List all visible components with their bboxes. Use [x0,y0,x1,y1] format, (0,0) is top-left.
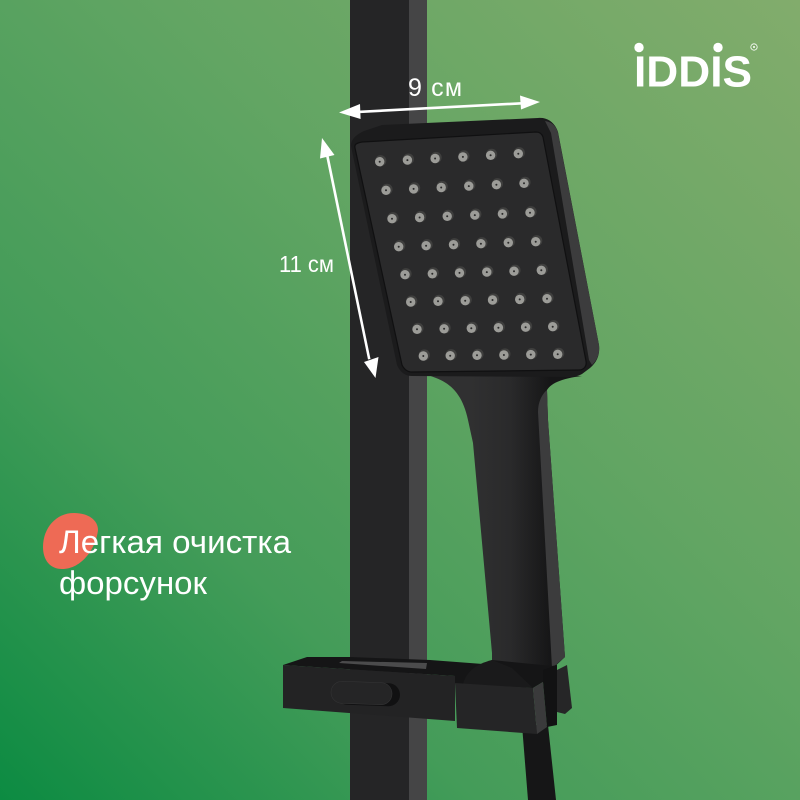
wall holder bracket [283,657,572,734]
dimension arrow: width 9 cm [339,96,540,119]
holder clip [557,665,572,714]
holder side faces [533,682,547,734]
head body [351,118,599,377]
caption: форсунок [59,565,208,601]
holder left block [283,665,455,721]
caption: Легкая очистка [59,524,291,560]
label: 11 cm: 11 см [279,251,334,277]
shower head [351,118,599,377]
slider button [331,681,400,707]
shower handle [420,372,582,669]
pivot dome [463,660,533,688]
spray nozzles [375,147,564,361]
shower hose [522,725,556,800]
holder right block [455,683,537,734]
label: 9 cm: 9 см [408,74,462,102]
caption [59,524,291,601]
head right side facet [545,121,599,365]
metal plate [339,661,427,669]
nozzle plate [355,132,586,372]
dimension arrow: height 11 cm [320,138,378,378]
red accent blob [43,513,98,569]
holder top face [283,657,557,688]
logo: IDDIS: IDDIS [634,48,752,96]
shower rail [350,0,427,800]
